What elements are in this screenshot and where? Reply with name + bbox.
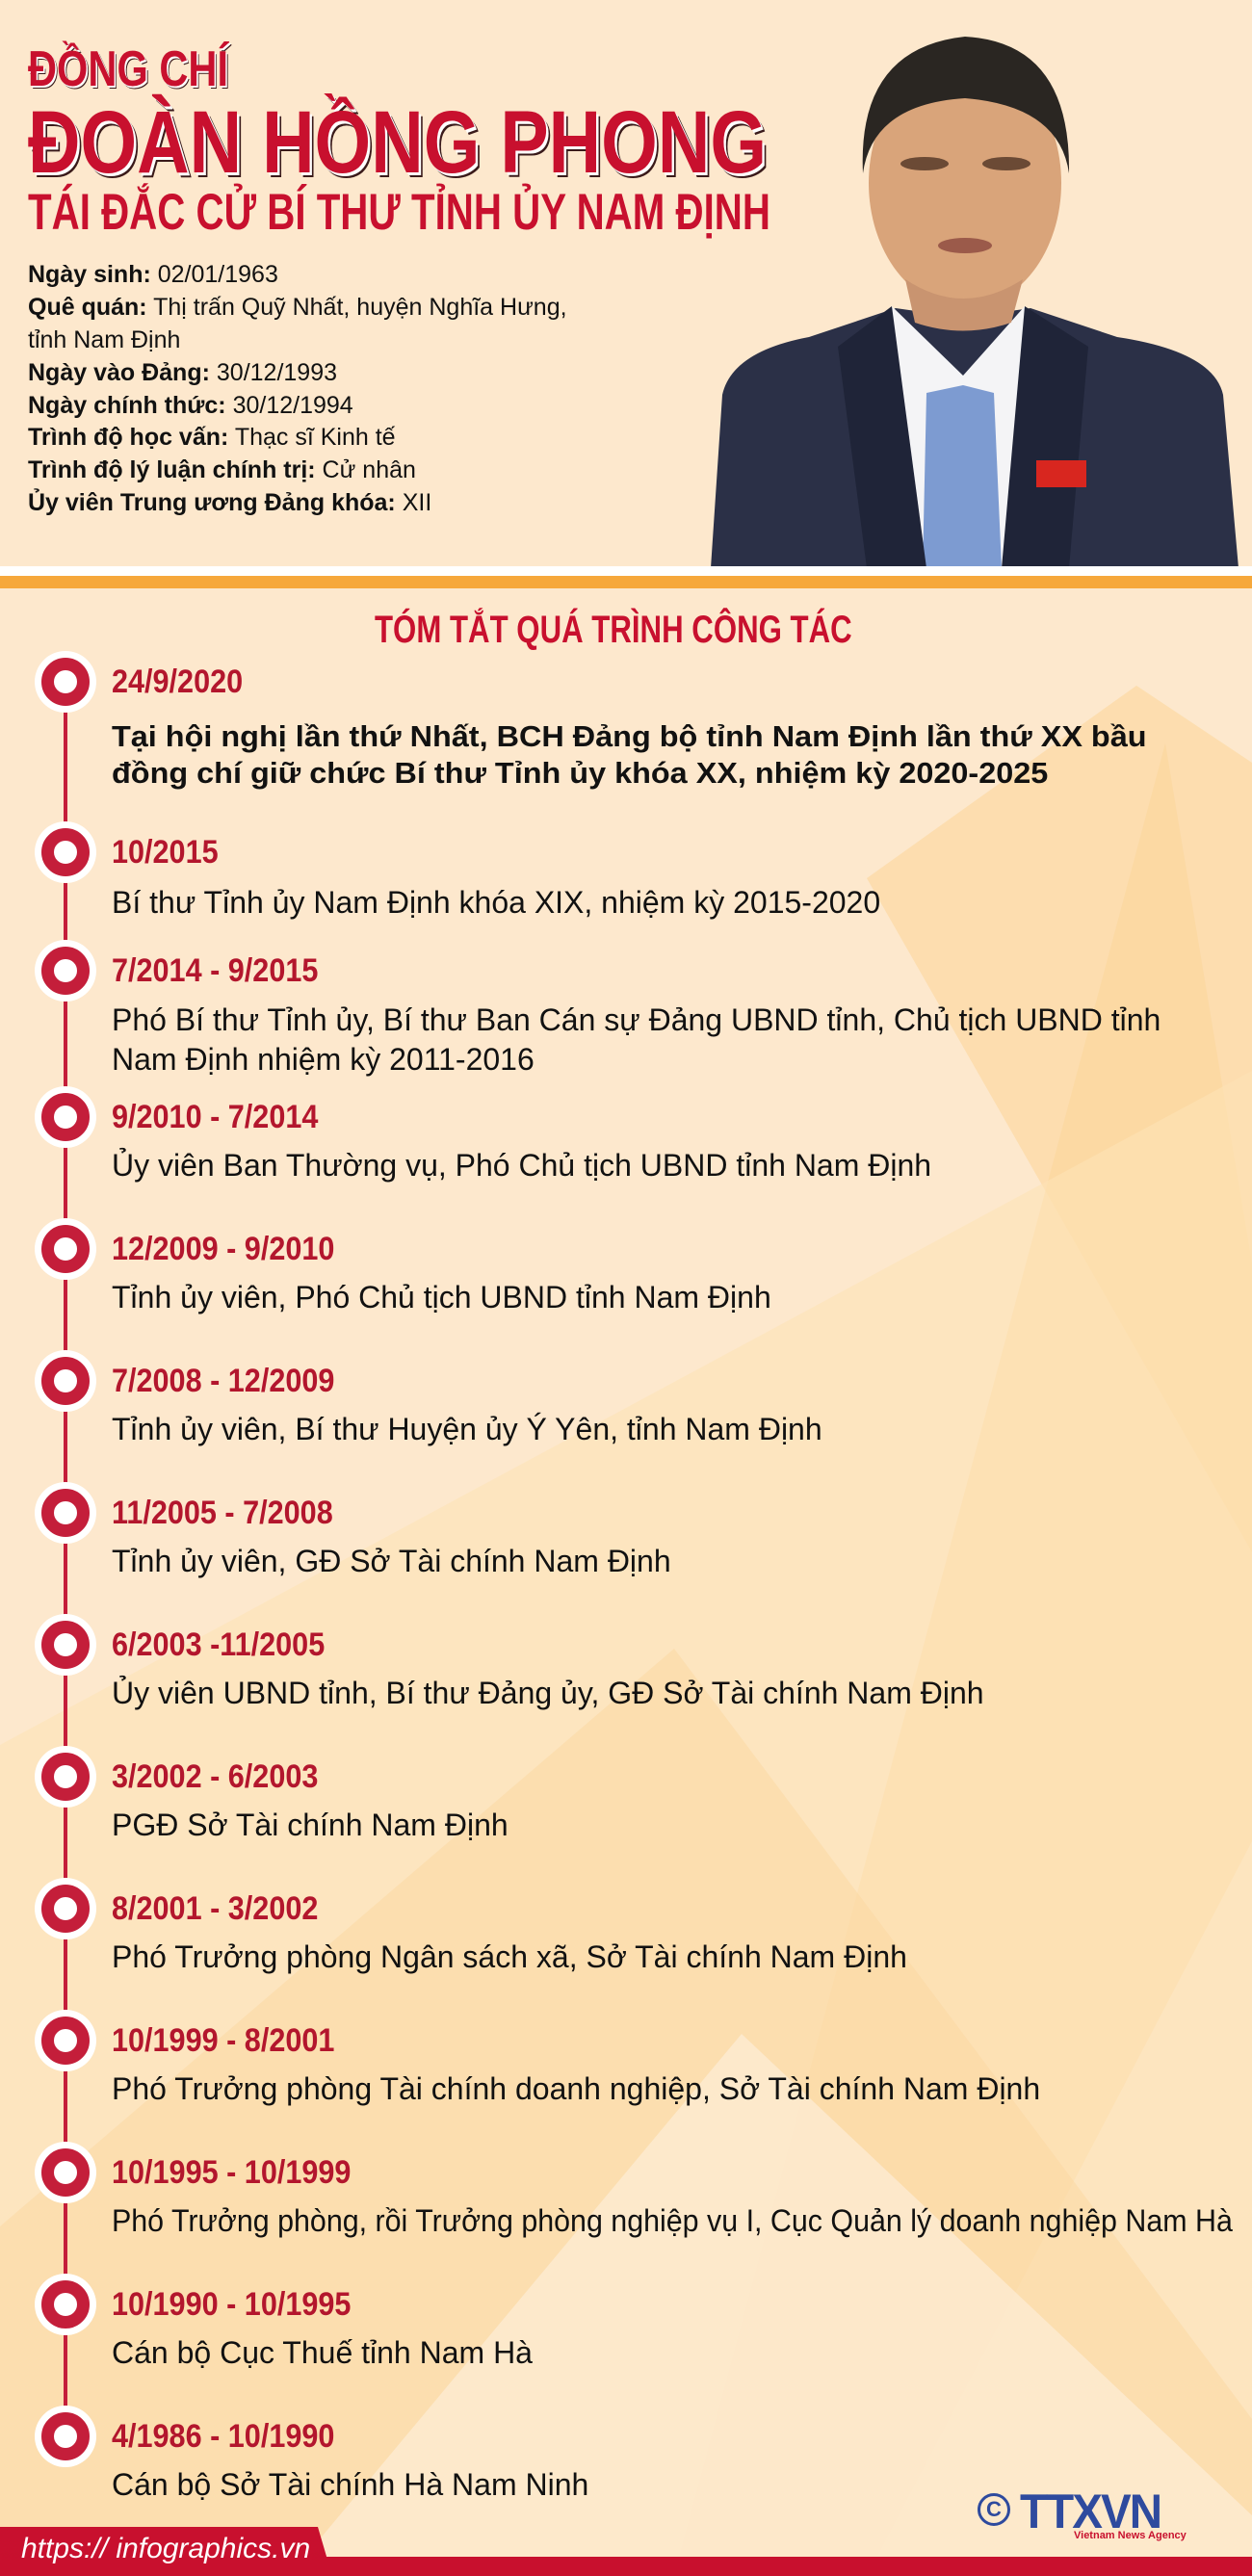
entry 2014: 7/2014 - 9/2015 xyxy=(112,952,318,989)
entry 2015: Bí thư Tỉnh ủy Nam Định khóa XIX, nhiệm kỳ 2015-2020 xyxy=(112,885,880,920)
entry 2003: 6/2003 -11/2005 xyxy=(112,1626,325,1663)
entry 2009: Tỉnh ủy viên, Phó Chủ tịch UBND tỉnh Nam Định xyxy=(112,1280,771,1314)
entry 2008 xyxy=(35,1350,822,1446)
divider bars xyxy=(0,566,1252,588)
entry 2003 xyxy=(35,1614,984,1710)
entry 2020: đồng chí giữ chức Bí thư Tỉnh ủy khóa XX, nhiệm kỳ 2020-2025 xyxy=(112,756,1048,790)
personal info block: Ngày vào Đảng: 30/12/1993 xyxy=(28,359,337,386)
logo: TTXVN: TTXVN xyxy=(1020,2485,1161,2538)
subtitle: TÁI ĐẮC CỬ BÍ THƯ TỈNH ỦY NAM ĐỊNH xyxy=(28,184,770,241)
entry 2020 xyxy=(35,651,1147,790)
entry 2010: 9/2010 - 7/2014 xyxy=(112,1099,318,1135)
entry 2002: PGĐ Sở Tài chính Nam Định xyxy=(112,1808,509,1842)
entry 2020: 24/9/2020 xyxy=(112,664,243,700)
personal info block: Quê quán: Thị trấn Quỹ Nhất, huyện Nghĩa Hưng, xyxy=(28,294,567,321)
entry 2008: 7/2008 - 12/2009 xyxy=(112,1363,334,1399)
entry 2020: Tại hội nghị lần thứ Nhất, BCH Đảng bộ tỉnh Nam Định lần thứ XX bầu xyxy=(112,719,1147,753)
entry 2005 xyxy=(35,1482,671,1578)
title: name: ĐOÀN HỒNG PHONG xyxy=(28,93,767,192)
entry 2014: Phó Bí thư Tỉnh ủy, Bí thư Ban Cán sự Đảng UBND tỉnh, Chủ tịch UBND tỉnh xyxy=(112,1002,1161,1037)
entry 1986: 4/1986 - 10/1990 xyxy=(112,2418,334,2455)
entry 2001 xyxy=(35,1878,907,1974)
entry 2002 xyxy=(35,1746,509,1842)
personal info block: Trình độ lý luận chính trị: Cử nhân xyxy=(28,456,416,483)
entry 2010: Ủy viên Ban Thường vụ, Phó Chủ tịch UBND tỉnh Nam Định xyxy=(112,1148,931,1183)
footer bar xyxy=(0,2527,1252,2576)
timeline entries xyxy=(35,651,1233,2502)
entry 2009: 12/2009 - 9/2010 xyxy=(112,1231,334,1267)
personal info block: tỉnh Nam Định xyxy=(28,326,180,353)
personal info block: Ngày sinh: 02/01/1963 xyxy=(28,261,278,288)
section heading: TÓM TẮT QUÁ TRÌNH CÔNG TÁC xyxy=(375,609,852,651)
entry 1986: Cán bộ Sở Tài chính Hà Nam Ninh xyxy=(112,2467,588,2502)
entry 1995: Phó Trưởng phòng, rồi Trưởng phòng nghiệp vụ I, Cục Quản lý doanh nghiệp Nam Hà xyxy=(112,2203,1233,2238)
entry 1995: 10/1995 - 10/1999 xyxy=(112,2154,351,2191)
timeline line xyxy=(64,682,67,2436)
entry 1986 xyxy=(35,2406,588,2502)
entry 2008: Tỉnh ủy viên, Bí thư Huyện ủy Ý Yên, tỉnh Nam Định xyxy=(112,1412,822,1446)
entry 1990 xyxy=(35,2274,533,2370)
entry 2015 xyxy=(35,821,880,920)
entry 2001: Phó Trưởng phòng Ngân sách xã, Sở Tài chính Nam Định xyxy=(112,1939,907,1974)
logo: TTXVN: C xyxy=(986,2497,1002,2521)
entry 2014 xyxy=(35,940,1161,1077)
background shapes xyxy=(0,686,1252,2537)
entry 2005: 11/2005 - 7/2008 xyxy=(112,1495,333,1531)
entry 1990: Cán bộ Cục Thuế tỉnh Nam Hà xyxy=(112,2335,533,2370)
footer url: https:// infographics.vn xyxy=(21,2533,310,2564)
entry 2003: Ủy viên UBND tỉnh, Bí thư Đảng ủy, GĐ Sở Tài chính Nam Định xyxy=(112,1676,984,1710)
entry 1990: 10/1990 - 10/1995 xyxy=(112,2286,351,2323)
entry 1999: 10/1999 - 8/2001 xyxy=(112,2022,334,2059)
entry 2002: 3/2002 - 6/2003 xyxy=(112,1758,318,1795)
personal info block: Ngày chính thức: 30/12/1994 xyxy=(28,392,353,419)
entry 1999 xyxy=(35,2010,1040,2106)
portrait photo xyxy=(711,37,1239,566)
entry 2001: 8/2001 - 3/2002 xyxy=(112,1890,318,1927)
entry 2009 xyxy=(35,1218,771,1314)
logo: TTXVN: Vietnam News Agency xyxy=(1074,2530,1187,2541)
logo: TTXVN xyxy=(978,2485,1187,2541)
personal info block: Ủy viên Trung ương Đảng khóa: XII xyxy=(28,489,431,516)
personal info block xyxy=(28,261,567,516)
entry 2010 xyxy=(35,1086,931,1183)
entry 2005: Tỉnh ủy viên, GĐ Sở Tài chính Nam Định xyxy=(112,1544,671,1578)
personal info block: Trình độ học vấn: Thạc sĩ Kinh tế xyxy=(28,424,396,451)
entry 1995 xyxy=(35,2142,1233,2238)
entry 2015: 10/2015 xyxy=(112,834,219,871)
entry 2014: Nam Định nhiệm kỳ 2011-2016 xyxy=(112,1042,535,1077)
entry 1999: Phó Trưởng phòng Tài chính doanh nghiệp, Sở Tài chính Nam Định xyxy=(112,2071,1040,2106)
title: Đồng chí: ĐỒNG CHÍ xyxy=(28,41,228,97)
